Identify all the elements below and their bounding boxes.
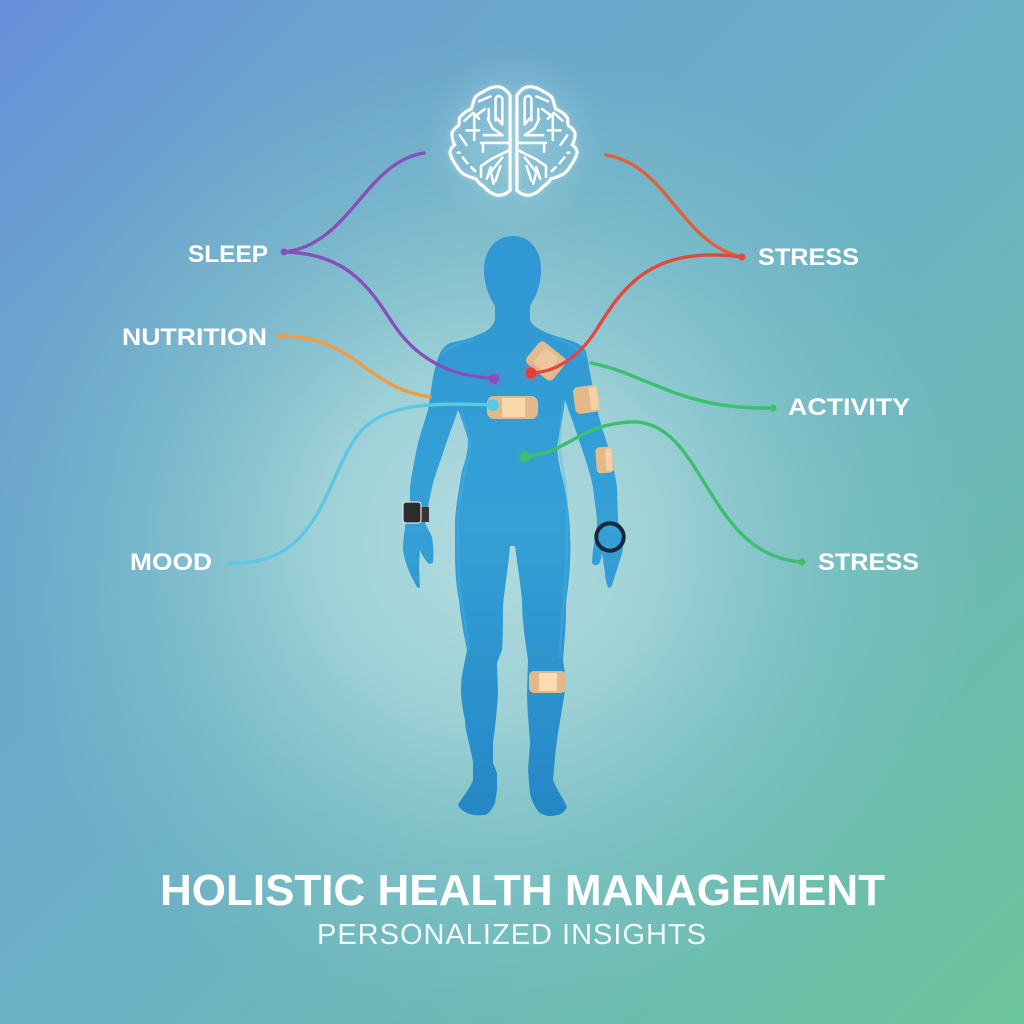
bandage: knee [529, 671, 566, 693]
title: HOLISTIC HEALTH MANAGEMENT [160, 866, 885, 915]
bandage: chest [487, 396, 538, 419]
bandage: shoulder [524, 339, 568, 383]
right hemisphere outline [517, 87, 577, 195]
bandage: forearm [595, 446, 614, 474]
label: activity: ACTIVITY [788, 394, 910, 421]
label: nutrition: NUTRITION [122, 324, 267, 351]
label: stress top: STRESS [758, 244, 859, 271]
connector: activity (green) [591, 363, 776, 412]
human body silhouette [403, 236, 623, 816]
smartwatch [403, 502, 429, 523]
connector: nutrition (orange) [277, 333, 430, 397]
connector: stress top (red) [523, 155, 746, 381]
icon: circuit brain [450, 87, 577, 195]
label: sleep: SLEEP [188, 241, 268, 268]
right circuits [517, 96, 569, 184]
bandage: upper arm [572, 384, 601, 415]
label: mood: MOOD [130, 549, 212, 576]
connector: sleep (purple) [280, 153, 502, 387]
left hemisphere outline [450, 87, 510, 195]
wrist ring [596, 523, 624, 551]
label: stress lower: STRESS [818, 549, 919, 576]
body edge highlights [443, 337, 585, 658]
connector: mood (cyan) [228, 399, 499, 563]
subtitle: PERSONALIZED INSIGHTS [317, 919, 706, 951]
left circuits [458, 96, 510, 184]
connector: stress lower (green) [517, 422, 806, 566]
